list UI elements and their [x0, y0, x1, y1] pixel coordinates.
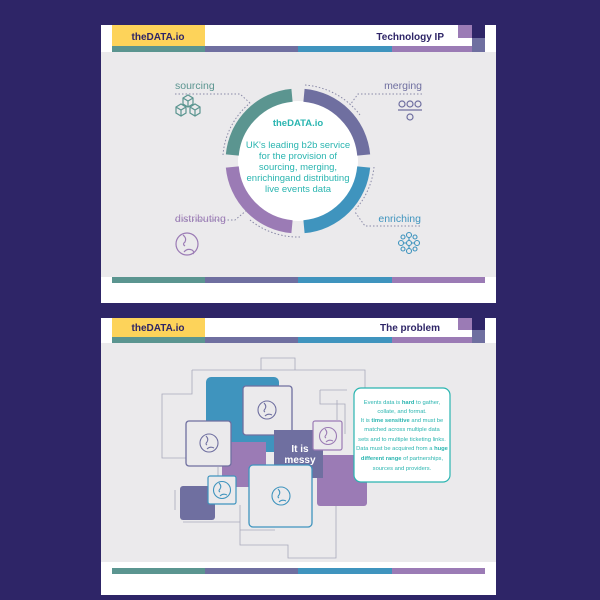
callout: problem text: sources and providers.	[373, 466, 432, 472]
messy shapes: messy	[284, 455, 316, 466]
header: logo: theDATA.io	[132, 32, 184, 43]
callout: problem text: It is time sensitive and must be	[361, 418, 443, 424]
label: enriching: enriching	[378, 213, 421, 225]
icon: network	[398, 232, 420, 254]
icon: merging	[398, 101, 422, 120]
center text: theDATA.io	[273, 118, 323, 129]
header: logo	[112, 25, 205, 46]
icon: cubes	[176, 95, 200, 116]
panel: technology IP slide	[101, 25, 496, 303]
icon: globe	[176, 233, 198, 255]
ring diagram	[175, 85, 422, 237]
icons: globes	[200, 401, 336, 505]
circuit lines	[162, 358, 365, 558]
label: merging: merging	[384, 80, 422, 92]
callout: problem text: collate, and format.	[377, 409, 427, 415]
center text: enrichingand distributing	[247, 173, 349, 184]
messy shapes	[180, 377, 367, 527]
label: distributing: distributing	[175, 213, 226, 225]
callout: problem text: matched across multiple data	[364, 427, 440, 433]
header corner squares	[458, 25, 485, 52]
callout: problem text: different range of partnerships,	[361, 456, 443, 462]
header: title: Technology IP	[376, 32, 444, 43]
callout: problem text	[354, 388, 450, 482]
header: title: The problem	[380, 323, 440, 334]
label: sourcing: sourcing	[175, 80, 215, 92]
callout: problem text: Data must be acquired from a huge	[356, 446, 449, 452]
header: logo: theDATA.io	[132, 323, 184, 334]
center text	[246, 118, 350, 195]
center text: live events data	[265, 184, 332, 195]
center text: sourcing, merging,	[259, 162, 337, 173]
panel: the problem slide	[101, 318, 496, 595]
center text: for the provision of	[259, 151, 337, 162]
header: logo	[112, 318, 205, 337]
center text: UK's leading b2b service	[246, 140, 350, 151]
text: it is messy: It is	[291, 444, 309, 455]
callout: problem text: Events data is hard to gather,	[364, 400, 441, 406]
header corner squares	[458, 318, 485, 343]
callout: problem text: sets and to multiple ticketing links.	[358, 437, 446, 443]
